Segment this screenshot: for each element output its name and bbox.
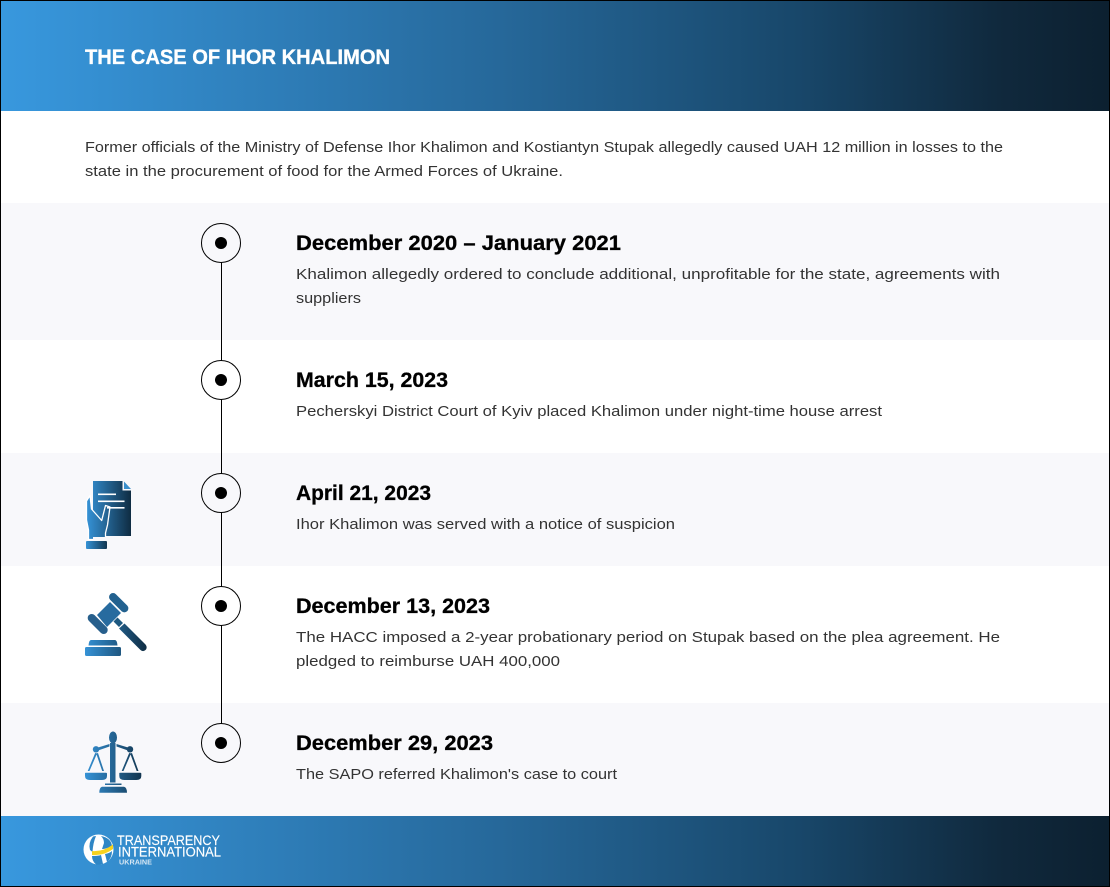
intro text: Former officials of the Ministry of Defense Ihor Khalimon and Kostiantyn Stupak allegedly caused UAH 12 million in losses to the <box>85 139 1003 156</box>
event: December 13, 2023: December 13, 2023 <box>296 595 490 618</box>
event: April 21, 2023 <box>296 482 675 533</box>
event: December 13, 2023 <box>296 595 1000 670</box>
event: April 21, 2023: Ihor Khalimon was served with a notice of suspicion <box>296 516 675 533</box>
event: December 13, 2023: The HACC imposed a 2-year probationary period on Stupak based on the plea agreement. He <box>296 629 1000 646</box>
icon: hand holding document <box>86 481 131 549</box>
panel: footer band <box>1 816 1109 886</box>
logo: Transparency International Ukraine: TRANSPARENCY <box>117 833 220 848</box>
panel: header band <box>1 1 1109 111</box>
event: December 2020 – January 2021: Khalimon allegedly ordered to conclude additional, unprofitable for the state, agreements with <box>296 266 1000 283</box>
timeline axis <box>202 224 240 762</box>
intro text: state in the procurement of food for the Armed Forces of Ukraine. <box>85 163 563 180</box>
event: March 15, 2023: Pecherskyi District Court of Kyiv placed Khalimon under night-time house arrest <box>296 403 883 420</box>
logo: Transparency International Ukraine <box>84 833 221 866</box>
event: December 2020 – January 2021: suppliers <box>296 290 361 307</box>
logo: Transparency International Ukraine: UKRAINE <box>119 860 152 866</box>
event: March 15, 2023 <box>296 369 883 420</box>
event: December 2020 – January 2021 <box>296 232 1000 307</box>
event: December 29, 2023: The SAPO referred Khalimon's case to court <box>296 766 618 783</box>
event: December 13, 2023: pledged to reimburse UAH 400,000 <box>296 653 560 670</box>
title: THE CASE OF IHOR KHALIMON <box>85 46 390 69</box>
event: December 29, 2023: December 29, 2023 <box>296 732 493 755</box>
icon: judge's gavel <box>85 591 147 656</box>
event: April 21, 2023: April 21, 2023 <box>296 482 431 505</box>
intro text <box>85 139 1003 180</box>
icon: scales of justice <box>85 732 141 793</box>
panel: timeline row backgrounds <box>1 203 1109 816</box>
event: December 29, 2023 <box>296 732 618 783</box>
logo: Transparency International Ukraine: INTERNATIONAL <box>118 845 221 860</box>
event: March 15, 2023: March 15, 2023 <box>296 369 448 392</box>
event: December 2020 – January 2021: December 2020 – January 2021 <box>296 232 621 255</box>
